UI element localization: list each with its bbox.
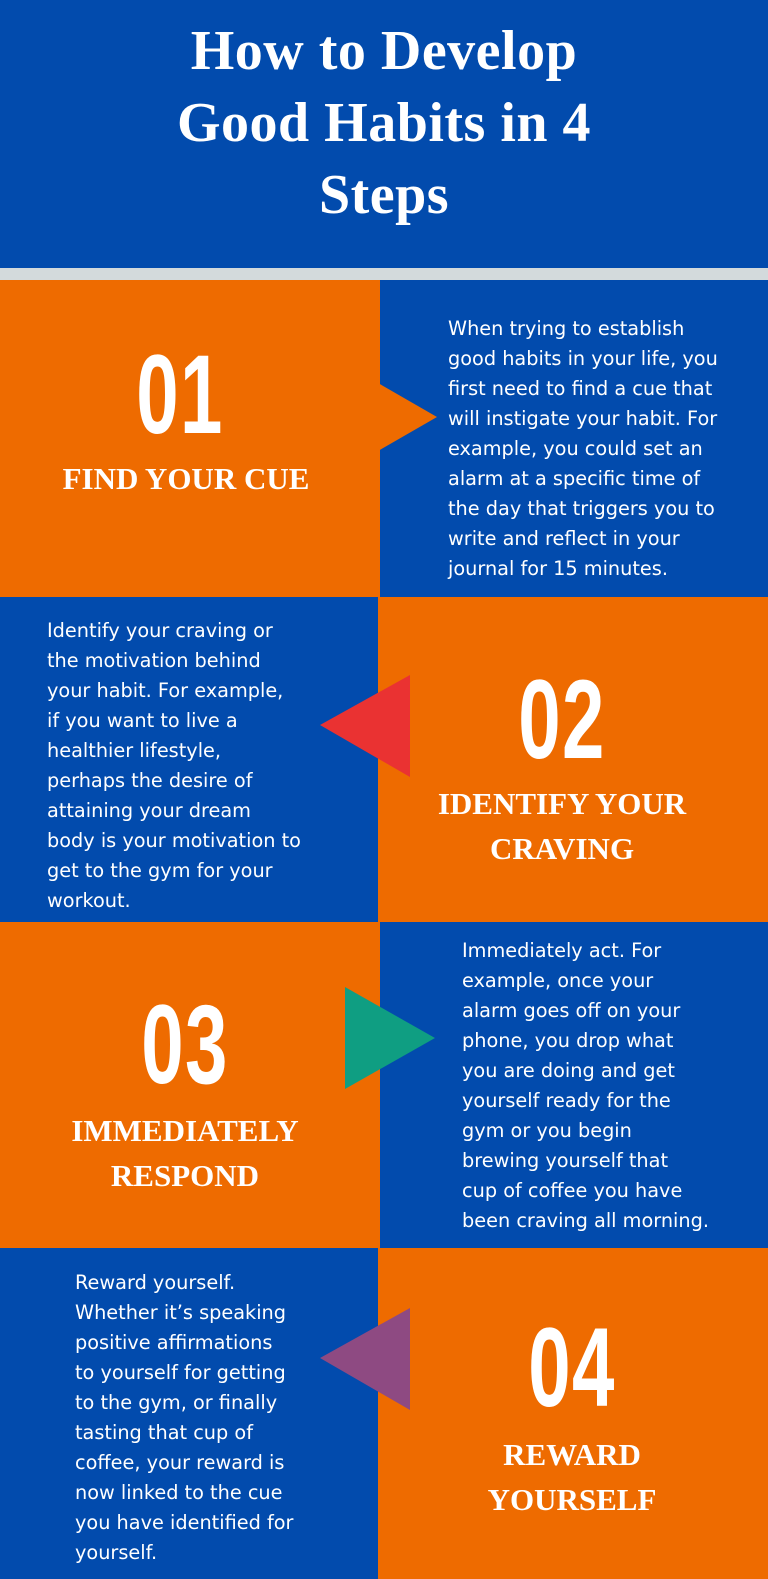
number 03: 03 [141, 982, 229, 1107]
title: How to Develop [191, 20, 577, 82]
text 4: positive affirmations [75, 1331, 272, 1354]
arrow 1 [380, 384, 437, 450]
text 4: yourself. [75, 1541, 157, 1564]
label 4: YOURSELF [488, 1482, 656, 1517]
text 1: will instigate your habit. For [448, 407, 717, 430]
text 2: the motivation behind [47, 649, 261, 672]
text 2: attaining your dream [47, 799, 251, 822]
text 3: yourself ready for the [462, 1089, 671, 1112]
text 2: if you want to live a [47, 709, 238, 732]
arrow 2 [320, 675, 410, 777]
text 3: you are doing and get [462, 1059, 675, 1082]
text 2: Identify your craving or [47, 619, 273, 642]
text 1: journal for 15 minutes. [448, 557, 668, 580]
text 4: coffee, your reward is [75, 1451, 284, 1474]
text 3: gym or you begin [462, 1119, 632, 1142]
text 2: your habit. For example, [47, 679, 283, 702]
text 1: When trying to establish [448, 317, 684, 340]
number 04: 04 [528, 1305, 616, 1430]
text 1: example, you could set an [448, 437, 703, 460]
arrow 3 [345, 987, 435, 1089]
label 3: IMMEDIATELY [71, 1113, 299, 1148]
text 4: you have identified for [75, 1511, 293, 1534]
text 3: phone, you drop what [462, 1029, 673, 1052]
text 3: alarm goes off on your [462, 999, 680, 1022]
step 1 panel [0, 280, 718, 597]
text 2 [47, 619, 301, 912]
label 2 [438, 786, 686, 866]
text 4: now linked to the cue [75, 1481, 282, 1504]
label 4: REWARD [503, 1437, 641, 1472]
text 3 [462, 939, 709, 1232]
title [177, 20, 591, 226]
text 3: been craving all morning. [462, 1209, 709, 1232]
label 1: FIND YOUR CUE [63, 461, 309, 496]
text 1: write and reflect in your [448, 527, 680, 550]
text 4: to yourself for getting [75, 1361, 286, 1384]
number 02: 02 [518, 657, 606, 782]
step 3 panel [0, 922, 709, 1248]
text 3: example, once your [462, 969, 653, 992]
text 4: Whether it’s speaking [75, 1301, 286, 1324]
step 2 panel [47, 597, 768, 922]
text 4 [75, 1271, 294, 1564]
title: Steps [319, 164, 449, 226]
header [0, 0, 768, 268]
step 4 panel [75, 1248, 768, 1579]
text 4: tasting that cup of [75, 1421, 253, 1444]
text 1: the day that triggers you to [448, 497, 715, 520]
label 3: RESPOND [111, 1158, 259, 1193]
text 2: perhaps the desire of [47, 769, 252, 792]
text 3: Immediately act. For [462, 939, 661, 962]
text 1: first need to find a cue that [448, 377, 712, 400]
label 3 [71, 1113, 299, 1193]
text 2: get to the gym for your [47, 859, 273, 882]
text 2: healthier lifestyle, [47, 739, 221, 762]
text 4: Reward yourself. [75, 1271, 235, 1294]
text 2: body is your motivation to [47, 829, 301, 852]
text 1: good habits in your life, you [448, 347, 718, 370]
arrow 4 [320, 1308, 410, 1410]
number 01: 01 [136, 332, 224, 457]
text 1: alarm at a specific time of [448, 467, 700, 490]
text 1 [448, 317, 718, 580]
text 4: to the gym, or finally [75, 1391, 277, 1414]
label 2: IDENTIFY YOUR [438, 786, 686, 821]
text 2: workout. [47, 889, 131, 912]
title: Good Habits in 4 [177, 92, 591, 154]
text 3: cup of coffee you have [462, 1179, 682, 1202]
label 4 [488, 1437, 656, 1517]
text 3: brewing yourself that [462, 1149, 668, 1172]
label 2: CRAVING [490, 831, 634, 866]
